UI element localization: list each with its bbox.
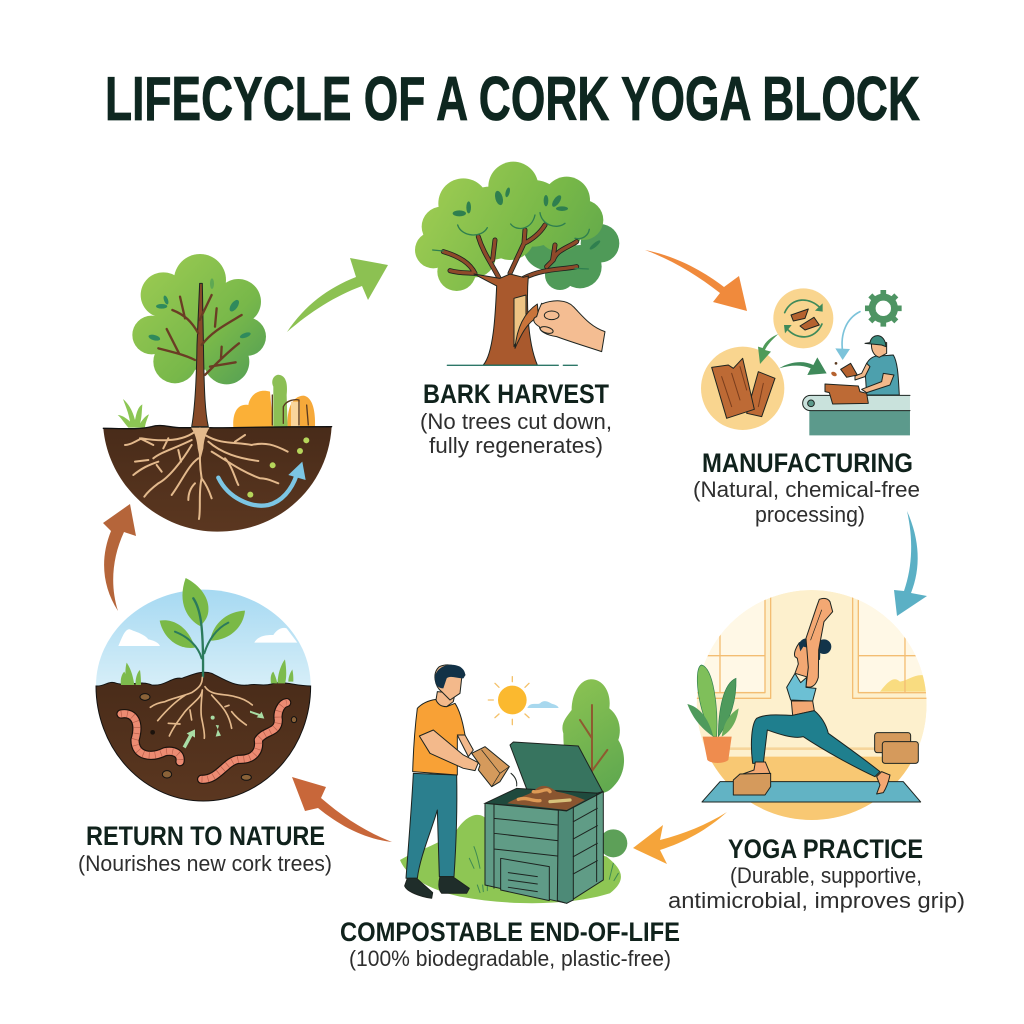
leaves bbox=[453, 187, 601, 251]
ground line bbox=[447, 363, 577, 367]
label: yoga practice: antimicrobial, improves grip) bbox=[668, 888, 965, 913]
icon: sprout bbox=[160, 578, 245, 677]
icon: background tree bbox=[562, 679, 627, 857]
hand bbox=[515, 301, 605, 352]
panel: yoga practice bbox=[687, 590, 926, 820]
roots bbox=[125, 428, 288, 519]
figure: yogi in warrior pose bbox=[740, 598, 890, 794]
icon: cork planks circle bbox=[701, 347, 784, 430]
trunk and branches bbox=[192, 283, 208, 427]
icon: worker bbox=[830, 336, 899, 395]
arrow: bark harvest to manufacturing bbox=[645, 250, 747, 311]
icon: cork blocks bbox=[733, 733, 918, 795]
windows bbox=[696, 597, 926, 699]
soil bbox=[103, 425, 332, 532]
icon: potted plant bbox=[687, 665, 739, 763]
label: bark harvest bbox=[420, 379, 612, 458]
label: return to nature bbox=[78, 821, 332, 876]
panel: regrowth tree and soil bbox=[103, 254, 332, 532]
icon: decomposing matter bbox=[233, 375, 315, 428]
panel: compostable end-of-life bbox=[400, 665, 627, 903]
label: compostable end-of-life bbox=[340, 917, 680, 971]
label: return to nature: RETURN TO NATURE bbox=[86, 821, 325, 851]
label: manufacturing: (Natural, chemical-free bbox=[693, 477, 920, 502]
nutrient cycle arrow bbox=[218, 437, 309, 506]
label: compostable end-of-life: (100% biodegradable, plastic-free) bbox=[349, 946, 671, 971]
soil bbox=[96, 672, 311, 801]
panel: return to nature bbox=[96, 578, 311, 801]
icon: gear bbox=[865, 290, 902, 327]
label: return to nature: (Nourishes new cork trees) bbox=[78, 851, 332, 876]
label: manufacturing: MANUFACTURING bbox=[702, 448, 913, 478]
yoga mat bbox=[702, 782, 921, 802]
label: manufacturing bbox=[693, 448, 920, 527]
arrow: yoga practice to composting bbox=[633, 812, 727, 864]
tree crown bbox=[415, 162, 619, 291]
label: yoga practice: (Durable, supportive, bbox=[730, 863, 922, 888]
stones and nutrient arrows bbox=[140, 694, 297, 780]
grass bbox=[121, 659, 293, 685]
label: yoga practice bbox=[668, 834, 965, 913]
figure: man with cork block bbox=[405, 665, 517, 898]
roots bbox=[150, 677, 252, 738]
grass bbox=[118, 399, 149, 428]
arrows: flow between steps bbox=[758, 312, 860, 375]
canopy curves bbox=[433, 213, 589, 269]
branches bbox=[443, 225, 577, 280]
label: bark harvest: BARK HARVEST bbox=[423, 379, 609, 409]
grass bbox=[469, 847, 618, 893]
icon: sun and cloud bbox=[488, 677, 559, 725]
label: manufacturing: processing) bbox=[755, 502, 865, 527]
sky bbox=[96, 590, 311, 686]
leaves bbox=[148, 278, 251, 342]
arrow: composting to return to nature bbox=[292, 777, 392, 842]
label: bark harvest: (No trees cut down, bbox=[420, 409, 612, 434]
arrow: manufacturing to yoga practice bbox=[894, 511, 927, 616]
label: yoga practice: YOGA PRACTICE bbox=[728, 834, 923, 864]
tree crown bbox=[132, 254, 266, 384]
arrow: return to nature to regrowth bbox=[103, 504, 136, 611]
ground bbox=[400, 815, 621, 903]
bark cut strip bbox=[514, 295, 526, 347]
label: bark harvest: fully regenerates) bbox=[429, 433, 603, 458]
icon: compost bin bbox=[485, 742, 603, 903]
label: compostable end-of-life: COMPOSTABLE END-OF-LIFE bbox=[340, 917, 680, 947]
arrow: regrowth to bark harvest bbox=[287, 258, 388, 332]
icon: cork pieces circle bbox=[773, 288, 833, 348]
room background bbox=[696, 590, 926, 820]
icon: cork oak tree with hand peeling bark bbox=[415, 162, 619, 365]
icon: conveyor belt bbox=[803, 384, 910, 435]
panel: bark harvest bbox=[415, 162, 619, 365]
trunk bbox=[474, 274, 537, 365]
panel: manufacturing bbox=[701, 288, 910, 435]
worms bbox=[121, 703, 287, 779]
